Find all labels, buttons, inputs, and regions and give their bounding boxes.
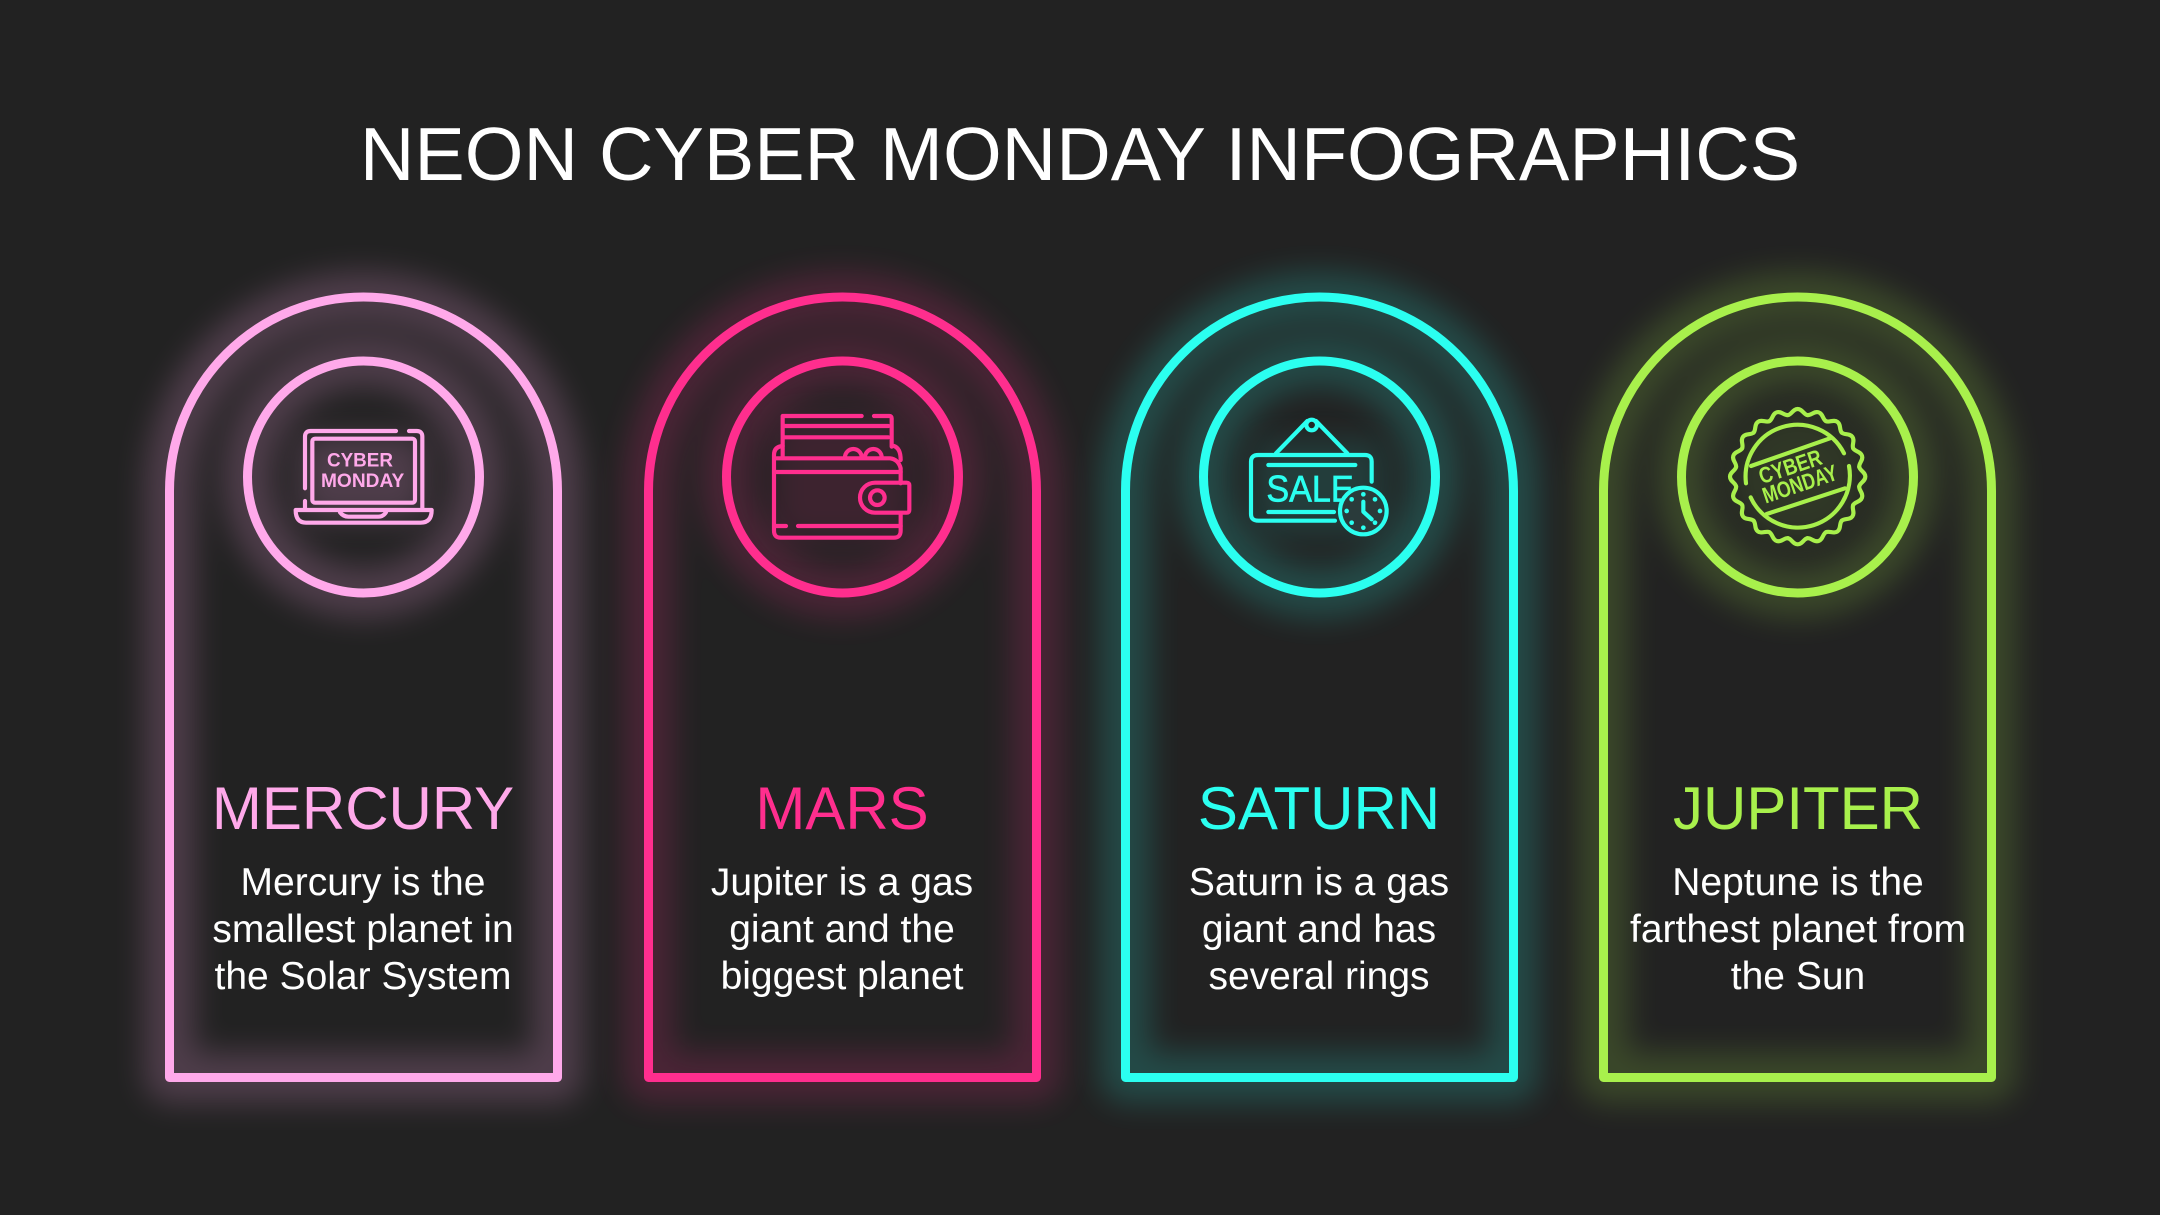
panel: mars	[648, 297, 1036, 1077]
title: NEON CYBER MONDAY INFOGRAPHICS	[360, 112, 1800, 196]
description: saturn: giant and has	[1202, 908, 1436, 951]
panel: mercury	[170, 297, 558, 1077]
icon: laptop	[296, 431, 432, 523]
heading: mars: MARS	[755, 775, 929, 842]
heading: mercury: MERCURY	[212, 775, 514, 842]
description: mercury: smallest planet in	[212, 908, 514, 951]
icon: laptop: CYBER	[327, 451, 393, 472]
heading: saturn: SATURN	[1198, 775, 1440, 842]
description: saturn: several rings	[1208, 955, 1430, 998]
description: jupiter: Neptune is the	[1672, 861, 1924, 904]
description: mercury: the Solar System	[215, 955, 511, 998]
arch outline	[648, 297, 1036, 1077]
arch outline	[1126, 297, 1514, 1077]
icon ring	[1204, 361, 1436, 593]
arch outline	[170, 297, 558, 1077]
description: saturn: Saturn is a gas	[1189, 861, 1449, 904]
icon ring	[1682, 361, 1914, 593]
icon ring	[726, 361, 958, 593]
arch outline	[1604, 297, 1992, 1077]
heading: jupiter: JUPITER	[1673, 775, 1923, 842]
icon ring	[248, 361, 480, 593]
icon: sale sign with clock: SALE	[1266, 468, 1354, 510]
icon: laptop: MONDAY	[321, 471, 404, 492]
icon: cyber monday badge: MONDAY	[1759, 459, 1841, 508]
panel: saturn	[1126, 297, 1514, 1077]
icon: cyber monday badge: CYBER	[1755, 444, 1825, 489]
description: mercury: Mercury is the	[241, 861, 485, 904]
icon: wallet	[774, 416, 909, 538]
description: mars: giant and the	[729, 908, 955, 951]
description: mars: biggest planet	[721, 955, 964, 998]
panel: jupiter	[1604, 297, 1992, 1077]
description: jupiter: the Sun	[1731, 955, 1865, 998]
description: mars: Jupiter is a gas	[711, 861, 973, 904]
description: jupiter: farthest planet from	[1630, 908, 1966, 951]
icon: cyber monday badge	[1730, 409, 1865, 544]
icon: sale sign with clock	[1251, 420, 1387, 534]
